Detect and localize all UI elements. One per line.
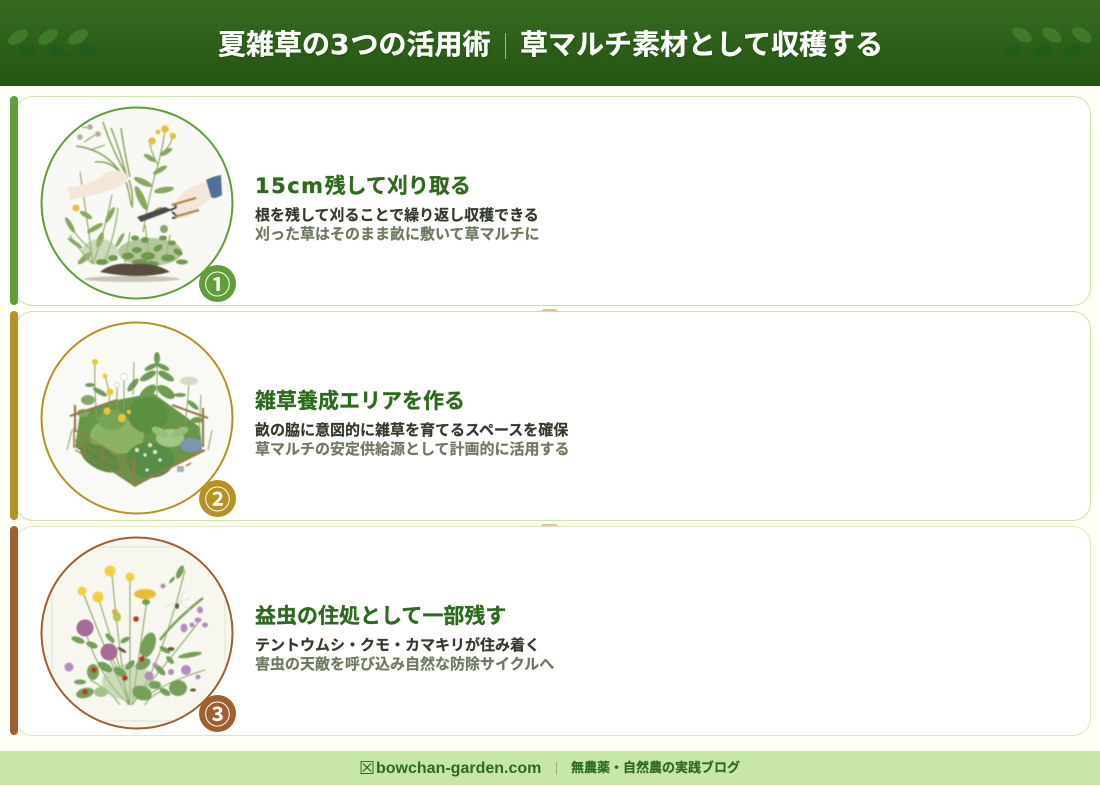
text: step 1 line 1: 根を残して刈ることで繰り返し収穫できる [255,206,539,224]
text: step 1 line 2: 刈った草はそのまま畝に敷いて草マルチに [255,225,540,243]
text: step 2 line 2: 草マルチの安定供給源として計画的に活用する [255,440,570,458]
heading: step 2: 雑草養成エリアを作る [255,389,465,413]
connector tab 2 [541,524,558,527]
header leaf decorations [8,27,1092,57]
panel: step 2 accent bar [10,311,18,520]
illustration: wildflowers and beneficial insects [40,536,234,730]
footer site name: bowchan-garden.com [376,760,541,777]
panel: step 1 accent bar [10,96,18,305]
heading: step 1: 15cm残して刈り取る [255,174,471,198]
footer tagline: 無農薬・自然農の実践ブログ [571,761,740,776]
heading: step 3: 益虫の住処として一部残す [255,604,506,628]
text: step 3 line 1: テントウムシ・クモ・カマキリが住み着く [255,636,540,654]
text: step 3 line 2: 害虫の天敵を呼び込み自然な防除サイクルへ [255,655,554,673]
title: 夏雑草の3つの活用術 草マルチ素材として収穫する [218,28,883,61]
panel: step 1 card [15,96,1091,306]
panel: step 3 card [15,526,1091,736]
footer [0,751,1100,785]
connector tab 1 [541,309,558,312]
panel: step 2 card [15,311,1091,521]
header banner [0,0,1100,86]
badge: step 3: ③ [204,695,230,732]
footer site name: ☒ [359,758,375,778]
badge: step 2: ② [204,480,230,517]
panel: step 3 accent bar [10,526,18,735]
footer divider [556,762,557,775]
badge: step 1: ① [204,265,230,302]
text: step 2 line 1: 畝の脇に意図的に雑草を育てるスペースを確保 [255,421,568,439]
